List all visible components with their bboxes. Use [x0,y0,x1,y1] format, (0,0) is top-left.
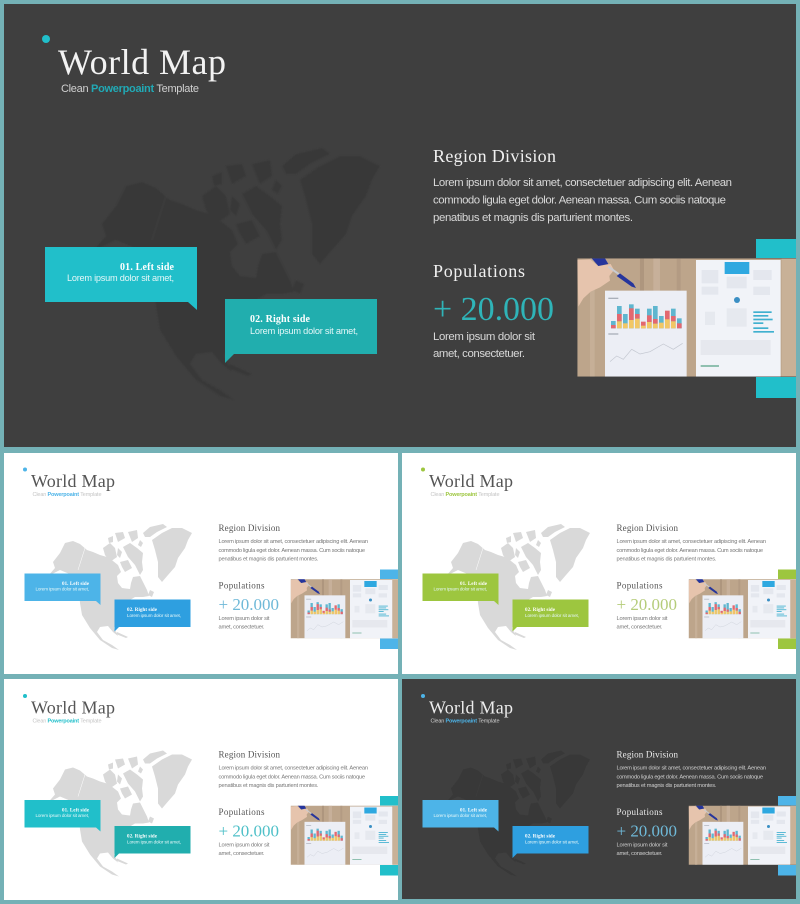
callout: right side [114,826,190,858]
region text: Lorem ipsum dolor sit amet, consectetuer adipiscing elit. Aenean [218,766,368,772]
title: World Map [58,42,226,82]
population number: + 20.000 [433,291,554,328]
heading: region division: Region Division [616,523,678,533]
callout: right side: Lorem ipsum dolor sit amet, [525,613,579,618]
region text: Lorem ipsum dolor sit amet, consectetuer adipiscing elit. Aenean [433,177,732,189]
region text: penatibus et magnis dis parturient montes. [616,556,717,562]
callout: right side: 02. Right side [127,608,158,613]
title dot [23,694,27,698]
region text: Lorem ipsum dolor sit amet, consectetuer adipiscing elit. Aenean [616,539,766,545]
panel: white teal slide [4,679,407,900]
population text: amet, consectetuer. [616,851,663,857]
accent: bottom corner [380,638,398,649]
accent: top corner [756,239,796,258]
callout: left side: Lorem ipsum dolor sit amet, [434,813,487,818]
subtitle: Clean Powerpoaint Template [61,83,199,95]
region text [218,766,368,789]
world map silhouette [48,524,192,650]
callout: right side: 02. Right side [127,834,158,840]
region text [433,177,732,224]
callout: left side: Lorem ipsum dolor sit amet, [36,813,89,818]
population text: amet, consectetuer. [218,624,265,630]
callout: left side [24,574,100,605]
population number: + 20.000 [616,822,677,840]
title: World Map [429,698,513,718]
population number: + 20.000 [218,595,279,614]
callout: right side [512,600,588,632]
subtitle: Clean Powerpoaint Template [430,718,500,724]
accent: top corner [778,570,800,579]
region text: commodo ligula eget dolor. Aenean massa. Cum sociis natoque [433,194,726,206]
callout: right side [114,600,190,632]
region text [616,539,766,562]
region text [218,539,368,562]
callout: left side: Lorem ipsum dolor sit amet, [36,586,89,592]
region text: penatibus et magnis dis parturient montes. [218,783,319,789]
population text: amet, consectetuer. [218,851,265,857]
heading: populations: Populations [616,807,663,817]
photo: charts on desk [689,579,800,638]
world map silhouette [107,210,217,356]
region text: penatibus et magnis dis parturient montes. [616,783,717,789]
title dot [42,35,50,43]
population number: + 20.000 [616,595,677,614]
population text: Lorem ipsum dolor sit [218,616,270,622]
photo: charts on desk [577,258,800,377]
photo: charts on desk [291,806,407,865]
accent: top corner [380,570,398,579]
title: World Map [31,471,115,491]
region text: commodo ligula eget dolor. Aenean massa. Cum sociis natoque [218,774,365,780]
population text: amet, consectetuer. [616,624,663,630]
population text [433,331,536,360]
callout: left side: 01. Left side [460,808,488,814]
population text: Lorem ipsum dolor sit [616,842,668,848]
callout: left side [422,574,498,605]
callout: right side: 02. Right side [525,608,556,613]
heading: populations: Populations [218,807,265,817]
region text [616,766,766,789]
panel: dark blue slide [402,679,800,899]
subtitle: Clean Powerpoaint Template [32,492,102,498]
callout: left side: Lorem ipsum dolor sit amet, [434,586,487,592]
population text [616,616,668,630]
world map silhouette [446,524,590,650]
accent: top corner [778,796,800,806]
callout: left side: 01. Left side [62,808,90,814]
callout: left side: 01. Left side [460,582,488,587]
region text: commodo ligula eget dolor. Aenean massa. Cum sociis natoque [218,548,365,554]
region text: commodo ligula eget dolor. Aenean massa. Cum sociis natoque [616,774,763,780]
accent: bottom corner [756,377,796,398]
population text [218,616,270,630]
subtitle: Clean Powerpoaint Template [32,718,102,724]
title dot [421,694,425,698]
heading: populations: Populations [616,580,663,590]
photo: charts on desk [689,806,800,865]
population text [616,842,668,857]
title dot [23,468,27,472]
callout: left side: 01. Left side [62,582,90,587]
population text: Lorem ipsum dolor sit [433,331,536,343]
callout: right side: 02. Right side [250,314,311,325]
world map silhouette [48,750,192,876]
panel: main dark slide [4,4,800,447]
heading: populations: Populations [433,261,525,281]
callout: right side [225,299,377,363]
heading: region division: Region Division [218,750,280,760]
accent: bottom corner [778,865,800,876]
panel: white green slide [402,453,800,674]
region text: Lorem ipsum dolor sit amet, consectetuer adipiscing elit. Aenean [616,766,766,772]
subtitle: Clean Powerpoaint Template [430,492,500,498]
region text: commodo ligula eget dolor. Aenean massa. Cum sociis natoque [616,548,763,554]
region text: penatibus et magnis dis parturient montes. [433,212,633,224]
population text: amet, consectetuer. [433,348,525,360]
accent: top corner [380,796,402,806]
title dot [421,468,425,472]
region text: Lorem ipsum dolor sit amet, consectetuer adipiscing elit. Aenean [218,539,368,545]
title: World Map [31,698,115,718]
region text: penatibus et magnis dis parturient montes. [218,556,319,562]
photo: charts on desk [291,579,407,638]
callout: left side: 01. Left side [120,262,175,273]
accent: bottom corner [380,865,402,876]
panel: white blue slide [4,453,407,674]
callout: right side: 02. Right side [525,834,556,840]
callout: right side: Lorem ipsum dolor sit amet, [127,840,181,844]
callout: right side [512,826,588,858]
title: World Map [429,471,513,491]
callout: right side: Lorem ipsum dolor sit amet, [525,840,579,844]
callout: right side: Lorem ipsum dolor sit amet, [250,326,358,336]
callout: right side: Lorem ipsum dolor sit amet, [127,613,181,618]
world map silhouette [446,750,590,876]
heading: region division: Region Division [218,523,280,533]
callout: left side: Lorem ipsum dolor sit amet, [67,273,174,283]
heading: region division: Region Division [616,750,678,760]
population text [218,842,270,857]
accent: bottom corner [778,638,800,649]
population number: + 20.000 [218,822,279,840]
callout: left side [24,800,100,832]
population text: Lorem ipsum dolor sit [218,842,270,848]
callout: left side [422,800,498,832]
heading: populations: Populations [218,580,265,590]
population text: Lorem ipsum dolor sit [616,616,668,622]
callout: left side [45,247,197,310]
heading: region division: Region Division [433,146,556,166]
